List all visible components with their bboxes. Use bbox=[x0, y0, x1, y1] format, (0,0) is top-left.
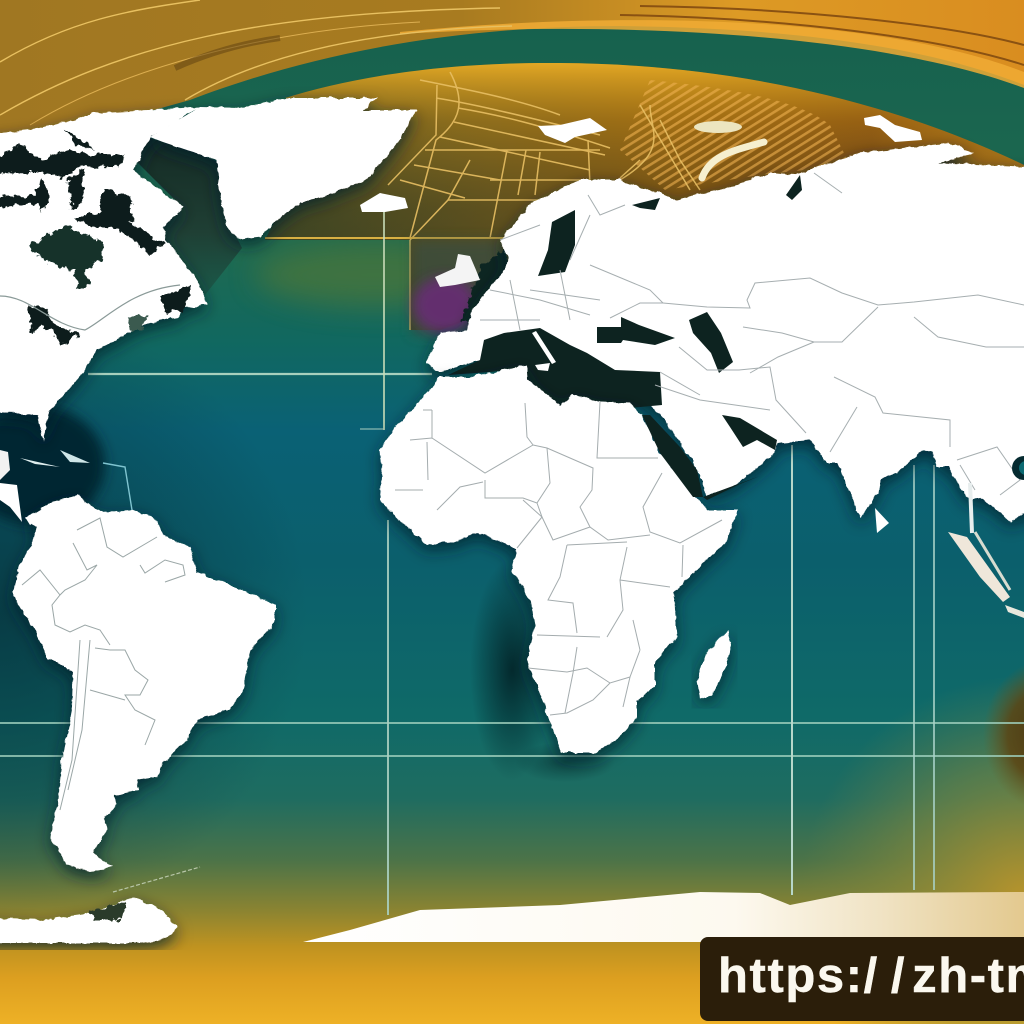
Davis Strait dark sea bbox=[125, 138, 242, 295]
continent: South America bbox=[13, 495, 275, 872]
inland seas of Eurasia bbox=[448, 175, 802, 408]
continent: North America bbox=[0, 107, 207, 440]
Red Sea and Gulf waters bbox=[642, 415, 777, 500]
Caspian Sea bbox=[689, 312, 733, 373]
North America fine border bbox=[0, 285, 180, 330]
continent: Greenland bbox=[150, 98, 417, 240]
Dark water near Europe bbox=[412, 240, 512, 335]
continent: Eurasia bbox=[426, 143, 1024, 522]
country borders of Africa bbox=[395, 402, 722, 715]
Southeast Asia islands bbox=[875, 456, 1024, 618]
Arctic islands bbox=[360, 115, 922, 287]
continent: Antarctica west bbox=[0, 867, 200, 943]
Ellesmere to Greenland ice link bbox=[150, 107, 240, 162]
Madagascar bbox=[697, 630, 732, 698]
top golden arc bands bbox=[0, 0, 1024, 135]
continent: Antarctica east bbox=[303, 892, 1024, 942]
graticule lines bbox=[0, 212, 1024, 915]
watermark label bbox=[700, 937, 1024, 1021]
Central America and Caribbean bbox=[0, 450, 132, 525]
Italy and Sicily bbox=[532, 331, 556, 371]
polar dome with graticule bbox=[265, 63, 1024, 330]
South America borders bbox=[22, 518, 185, 810]
continent: Africa bbox=[380, 365, 738, 753]
North America dark inland waters bbox=[0, 128, 190, 345]
country borders of Eurasia bbox=[480, 173, 1024, 495]
